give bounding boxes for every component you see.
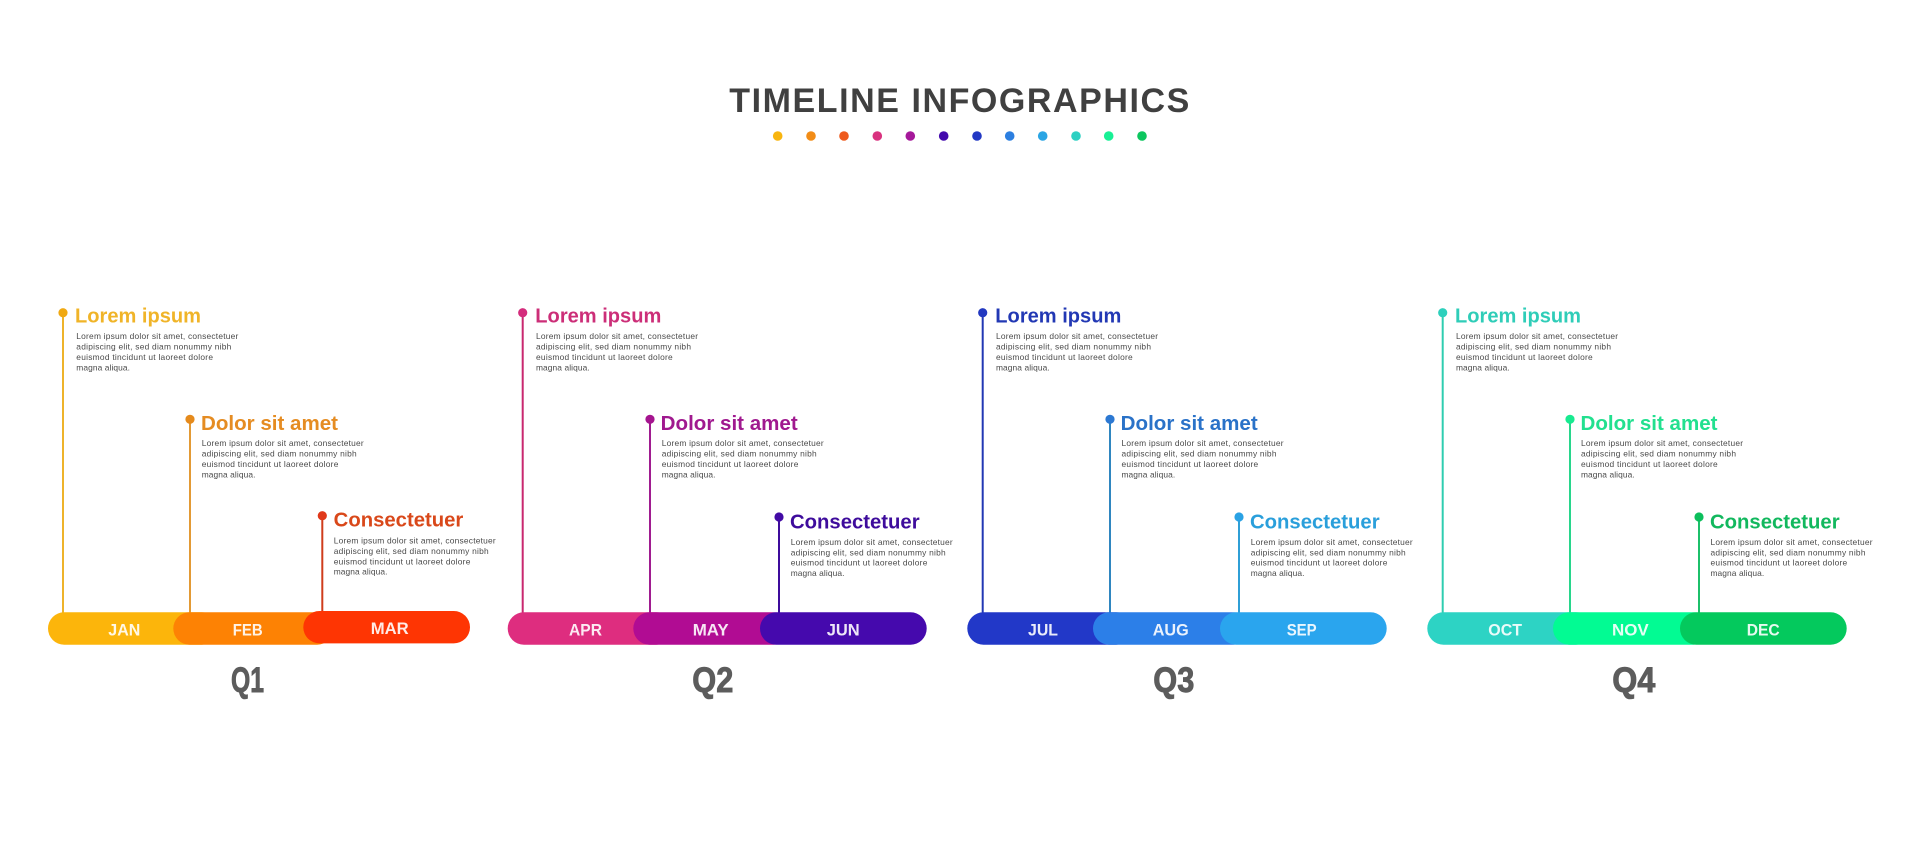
month bar: Q3: SEP: [1287, 620, 1317, 640]
callout: Lorem ipsum (July): Lorem ipsum dolor sit amet, consectetuer: [996, 331, 1158, 341]
callout: Consectetuer (June): adipiscing elit, sed diam nonummy nibh: [791, 547, 946, 557]
callout: Dolor sit amet (February): [185, 413, 364, 613]
callout: Lorem ipsum (January): [58, 306, 239, 613]
quarter label: Q2: Q2: [692, 661, 733, 700]
callout: Dolor sit amet (February): adipiscing elit, sed diam nonummy nibh: [202, 448, 357, 458]
callout: Lorem ipsum (October): [1438, 306, 1618, 613]
callout: Consectetuer (September): adipiscing elit, sed diam nonummy nibh: [1251, 547, 1406, 557]
callout: Dolor sit amet (May): adipiscing elit, sed diam nonummy nibh: [662, 448, 817, 458]
callout: Consectetuer (December): adipiscing elit, sed diam nonummy nibh: [1710, 547, 1866, 557]
quarter label: Q4: Q4: [1612, 661, 1656, 700]
callout: Lorem ipsum (July): magna aliqua.: [996, 362, 1050, 372]
callout: Consectetuer (December): [1694, 511, 1873, 613]
row of twelve coloured dots: [773, 131, 1147, 141]
callout: Lorem ipsum (October): Lorem ipsum dolor sit amet, consectetuer: [1456, 331, 1618, 341]
callout: Lorem ipsum (July): [978, 306, 1158, 613]
callout: Dolor sit amet (November): [1565, 413, 1743, 613]
callout: Consectetuer (December): magna aliqua.: [1710, 568, 1764, 578]
month bar: Q1: MAR: [371, 619, 409, 638]
callout: Dolor sit amet (May): magna aliqua.: [662, 469, 715, 479]
callout: Dolor sit amet (February): Lorem ipsum dolor sit amet, consectetuer: [202, 438, 364, 448]
month bar: Q4: DEC: [1747, 620, 1780, 640]
callout: Consectetuer (March): [318, 510, 496, 612]
panel: Q4: [1427, 306, 1873, 700]
callout: Consectetuer (March): Consectetuer: [334, 510, 464, 532]
callout: Dolor sit amet (November): adipiscing elit, sed diam nonummy nibh: [1581, 448, 1736, 458]
quarter label: Q1: Q1: [231, 661, 264, 700]
title: TIMELINE INFOGRAPHICS: [729, 82, 1189, 120]
callout: Dolor sit amet (November): Lorem ipsum dolor sit amet, consectetuer: [1581, 438, 1743, 448]
callout: Lorem ipsum (October): adipiscing elit, sed diam nonummy nibh: [1456, 342, 1611, 352]
callout: Consectetuer (March): Lorem ipsum dolor sit amet, consectetuer: [334, 535, 496, 545]
callout: Dolor sit amet (May): euismod tincidunt ut laoreet dolore: [662, 459, 799, 469]
callout: Lorem ipsum (April): [518, 306, 698, 613]
callout: Lorem ipsum (October): Lorem ipsum: [1455, 306, 1581, 328]
callout: Consectetuer (June): Lorem ipsum dolor sit amet, consectetuer: [791, 537, 953, 547]
month bar: Q2: APR: [569, 620, 602, 640]
month bar: Q4: NOV: [1612, 620, 1649, 640]
callout: Dolor sit amet (November): euismod tincidunt ut laoreet dolore: [1581, 459, 1718, 469]
callout: Dolor sit amet (February): Dolor sit amet: [201, 413, 338, 435]
month bar: Q2: [508, 612, 927, 645]
callout: Consectetuer (March): magna aliqua.: [334, 567, 387, 577]
callout: Lorem ipsum (April): adipiscing elit, sed diam nonummy nibh: [536, 342, 691, 352]
callout: Lorem ipsum (January): magna aliqua.: [76, 362, 130, 372]
callout: Lorem ipsum (July): euismod tincidunt ut laoreet dolore: [996, 352, 1133, 362]
callout: Consectetuer (June): euismod tincidunt ut laoreet dolore: [791, 558, 928, 568]
callout: Lorem ipsum (July): Lorem ipsum: [995, 306, 1121, 328]
callout: Dolor sit amet (August): magna aliqua.: [1122, 469, 1175, 479]
month bar: Q4: OCT: [1488, 620, 1523, 640]
callout: Dolor sit amet (May): Dolor sit amet: [661, 413, 798, 435]
callout: Consectetuer (September): magna aliqua.: [1251, 568, 1304, 578]
callout: Consectetuer (March): euismod tincidunt ut laoreet dolore: [334, 556, 471, 566]
panel: Q3: [967, 306, 1413, 700]
panel: Q1: [48, 306, 496, 700]
callout: Consectetuer (September): Consectetuer: [1250, 511, 1380, 533]
callout: Dolor sit amet (November): magna aliqua.: [1581, 469, 1635, 479]
callout: Lorem ipsum (January): euismod tincidunt ut laoreet dolore: [76, 352, 213, 362]
callout: Dolor sit amet (May): Lorem ipsum dolor sit amet, consectetuer: [662, 438, 824, 448]
callout: Consectetuer (June): magna aliqua.: [791, 568, 844, 578]
month bar: Q1: JAN: [108, 620, 140, 640]
panel: Q2: [508, 306, 953, 700]
callout: Lorem ipsum (January): Lorem ipsum dolor sit amet, consectetuer: [76, 331, 239, 341]
callout: Consectetuer (September): Lorem ipsum dolor sit amet, consectetuer: [1251, 537, 1413, 547]
callout: Consectetuer (September): euismod tincidunt ut laoreet dolore: [1251, 558, 1388, 568]
month bar: Q3: JUL: [1028, 620, 1058, 640]
callout: Dolor sit amet (November): Dolor sit amet: [1580, 413, 1718, 435]
callout: Lorem ipsum (July): adipiscing elit, sed diam nonummy nibh: [996, 342, 1151, 352]
callout: Lorem ipsum (April): euismod tincidunt ut laoreet dolore: [536, 352, 673, 362]
callout: Lorem ipsum (October): euismod tincidunt ut laoreet dolore: [1456, 352, 1593, 362]
callout: Consectetuer (December): euismod tincidunt ut laoreet dolore: [1710, 558, 1848, 568]
callout: Dolor sit amet (May): [645, 413, 824, 613]
callout: Consectetuer (March): adipiscing elit, sed diam nonummy nibh: [334, 546, 489, 556]
callout: Lorem ipsum (January): Lorem ipsum: [75, 306, 201, 328]
callout: Dolor sit amet (August): adipiscing elit, sed diam nonummy nibh: [1122, 448, 1277, 458]
month bar: Q3: AUG: [1153, 620, 1189, 640]
month bar: Q2: MAY: [693, 620, 729, 640]
callout: Lorem ipsum (April): Lorem ipsum: [535, 306, 661, 328]
callout: Consectetuer (June): [774, 511, 953, 613]
callout: Dolor sit amet (February): magna aliqua.: [202, 469, 255, 479]
callout: Dolor sit amet (August): Dolor sit amet: [1121, 413, 1258, 435]
callout: Lorem ipsum (October): magna aliqua.: [1456, 362, 1510, 372]
month bar: Q2: JUN: [827, 620, 860, 640]
month bar: Q1: [48, 611, 470, 645]
callout: Consectetuer (September): [1234, 511, 1413, 613]
callout: Lorem ipsum (April): magna aliqua.: [536, 362, 590, 372]
callout: Lorem ipsum (April): Lorem ipsum dolor sit amet, consectetuer: [536, 331, 698, 341]
month bar: Q1: FEB: [233, 620, 263, 640]
callout: Consectetuer (June): Consectetuer: [790, 511, 920, 533]
callout: Dolor sit amet (August): euismod tincidunt ut laoreet dolore: [1122, 459, 1259, 469]
callout: Dolor sit amet (August): [1105, 413, 1284, 613]
callout: Lorem ipsum (January): adipiscing elit, sed diam nonummy nibh: [76, 342, 232, 352]
quarter label: Q3: Q3: [1153, 661, 1194, 700]
month bar: Q3: [967, 612, 1387, 645]
callout: Consectetuer (December): Lorem ipsum dolor sit amet, consectetuer: [1710, 537, 1873, 547]
callout: Dolor sit amet (August): Lorem ipsum dolor sit amet, consectetuer: [1122, 438, 1284, 448]
callout: Dolor sit amet (February): euismod tincidunt ut laoreet dolore: [202, 459, 339, 469]
month bar: Q4: [1427, 612, 1847, 645]
callout: Consectetuer (December): Consectetuer: [1710, 511, 1840, 533]
